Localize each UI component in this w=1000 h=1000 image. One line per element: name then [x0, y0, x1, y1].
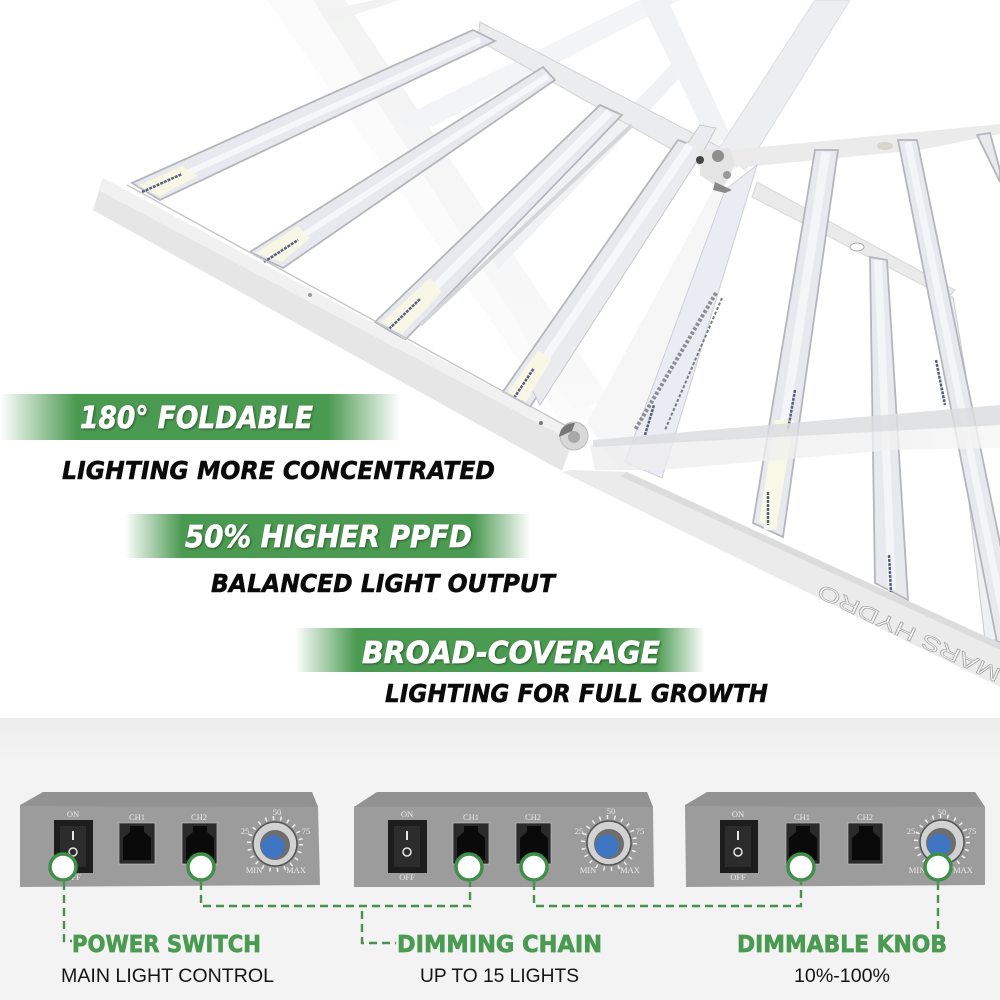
- marker: box 2 CH2: [521, 854, 547, 880]
- rocker switch: OFF: [65, 872, 81, 882]
- dimmer knob: 75: [302, 826, 310, 836]
- marker: box 3 knob: [925, 854, 951, 880]
- banner heading 3: BROAD-COVERAGE: [362, 636, 660, 671]
- CH1 port: [786, 812, 820, 864]
- dimmer knob: MAX: [953, 865, 973, 875]
- subtitle: balanced light output: BALANCED LIGHT OUTPUT: [211, 569, 557, 598]
- label: dimming chain: UP TO 15 LIGHTS: [420, 966, 579, 987]
- dimmer knob: [907, 807, 976, 875]
- CH2 port: CH2: [857, 812, 873, 822]
- right panel front rail with embossed brand: [562, 470, 1000, 687]
- lower hinge: [559, 422, 588, 450]
- marker: power switch: [50, 854, 76, 880]
- left panel LED bar 1: [132, 30, 495, 200]
- dashed connector: chain from box 2 to box 3: [534, 882, 801, 906]
- control box 3: [685, 792, 985, 887]
- CH2 port: CH2: [525, 812, 541, 822]
- marker: box 2 CH1: [456, 854, 482, 880]
- dimmer knob: MIN: [909, 865, 925, 875]
- banner: broad coverage: [295, 628, 705, 672]
- rocker switch: ON: [67, 809, 79, 819]
- label: power switch: MAIN LIGHT CONTROL: [61, 966, 274, 987]
- dimmer knob: 25: [241, 826, 249, 836]
- dimmer knob: 50: [273, 807, 281, 817]
- left panel front frame rail: [93, 178, 576, 471]
- dimmer knob: 25: [575, 826, 583, 836]
- label: power switch: [61, 932, 274, 987]
- banner heading 1: 180° FOLDABLE: [80, 401, 313, 436]
- rocker switch: OFF: [730, 872, 746, 882]
- CH2 port: CH2: [191, 812, 207, 822]
- banner heading 2: 50% HIGHER PPFD: [185, 520, 472, 555]
- rocker switch: ON: [401, 809, 413, 819]
- CH1 port: CH1: [129, 812, 145, 822]
- faded fold sweep of the right panel: [587, 190, 735, 470]
- CH2 port: [182, 812, 217, 864]
- control box 2: [354, 792, 654, 887]
- rocker switch: OFF: [399, 872, 415, 882]
- right LED bar 4: [898, 140, 1000, 642]
- marker: box 1 CH2: [188, 854, 214, 880]
- right LED bar 3: [870, 257, 908, 600]
- dashed connector: chain from box 1 to box 2: [201, 882, 470, 906]
- label: dimming chain: [397, 932, 602, 987]
- faded ghost bars behind the left panel: [267, 0, 730, 420]
- CH1 port: CH1: [794, 812, 810, 822]
- right panel middle rail: [752, 182, 955, 298]
- dimmer knob: MIN: [246, 865, 262, 875]
- rocker switch: [388, 809, 427, 882]
- label: dimming chain: DIMMING CHAIN: [397, 932, 602, 958]
- transparent folded rail crossing the right panel: [590, 405, 1000, 470]
- banner: 180 foldable: [0, 394, 400, 440]
- CH1 port: [453, 812, 489, 864]
- dimmer knob: 50: [607, 806, 615, 816]
- left panel LED bar 2: [250, 67, 555, 268]
- ghost bar rising to the top: [718, 0, 850, 170]
- right LED bar 5: [977, 133, 1000, 182]
- label: dimmable knob: [737, 932, 947, 987]
- subtitle: lighting more concentrated: LIGHTING MORE CONCENTRATED: [62, 456, 495, 485]
- right LED bar 1 with serrated edge: [625, 165, 757, 478]
- left panel LED bar 4: [502, 125, 716, 407]
- dimmer knob: MAX: [620, 865, 640, 875]
- left panel back rail: [478, 22, 725, 172]
- dashed connector: to dimming chain label: [362, 911, 396, 943]
- CH1 port: CH1: [463, 812, 479, 822]
- marker: box 3 CH1: [788, 854, 814, 880]
- CH2 port: [516, 812, 551, 864]
- CH2 port: [848, 812, 883, 864]
- dimmer knob: MAX: [286, 865, 306, 875]
- dimmer knob: 50: [938, 807, 946, 817]
- rocker switch: ON: [732, 809, 744, 819]
- dimmer knob: MIN: [580, 865, 596, 875]
- bottom grey panel: [0, 718, 1000, 1000]
- dimmer knob: 75: [968, 826, 976, 836]
- dimmer knob: 75: [636, 826, 644, 836]
- dimmer knob: 25: [907, 826, 915, 836]
- rocker switch: [54, 809, 93, 882]
- rocker switch: [720, 809, 758, 882]
- subtitle: lighting for full growth: LIGHTING FOR FULL GROWTH: [385, 679, 768, 708]
- label: power switch: POWER SWITCH: [72, 932, 261, 958]
- dimmer knob: [241, 807, 310, 875]
- label: dimmable knob: 10%-100%: [794, 966, 890, 987]
- upper hinge: [696, 148, 735, 193]
- right LED bar 2: [753, 150, 838, 537]
- left panel LED bar 3: [375, 105, 632, 340]
- dashed connector: power switch: [64, 882, 72, 941]
- right panel top rail: [730, 124, 1000, 168]
- dimmer knob: [575, 806, 644, 875]
- product photo: foldable LED light frame: [93, 0, 1000, 687]
- CH1 port: [119, 812, 155, 864]
- banner: 50% higher PPFD: [125, 514, 530, 558]
- control box 1: [20, 792, 320, 887]
- label: dimmable knob: DIMMABLE KNOB: [737, 932, 947, 958]
- dashed connector: dimmable knob: [937, 882, 939, 933]
